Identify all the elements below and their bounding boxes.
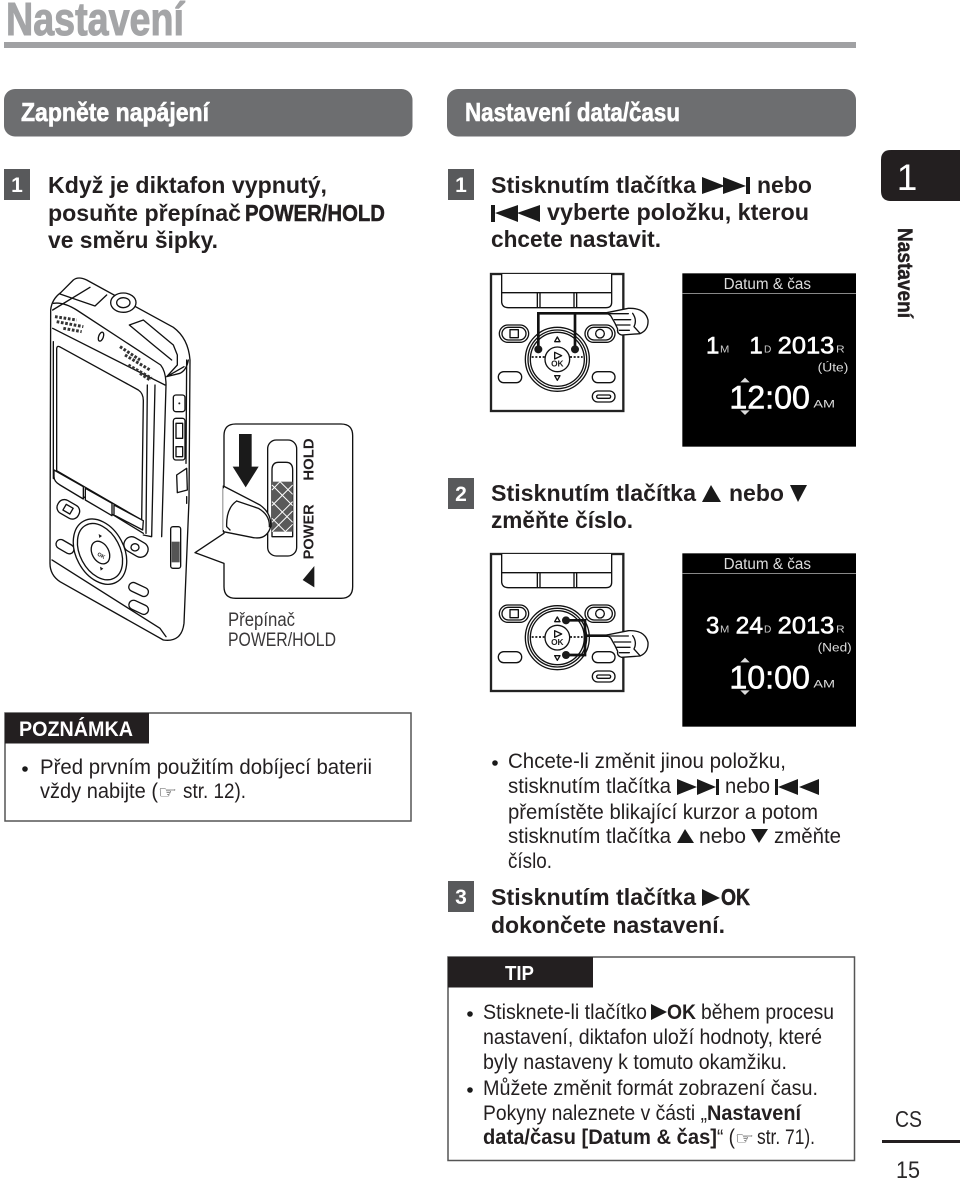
bullet note: changing items: Chcete-li změnit jinou položku, [508, 750, 786, 773]
step 1 right: instruction: nebo [757, 172, 812, 198]
device screen 2: Datum & čas [724, 556, 811, 573]
bullet note: changing items: přemístěte blikající kurzor a potom [508, 801, 818, 824]
device screen 2: 2013 [778, 613, 834, 640]
heading: power on [4, 89, 412, 136]
recorder body: OK [96, 552, 106, 561]
device screen 2: D [764, 625, 771, 636]
tip text: byly nastaveny k tomuto okamžiku. [483, 1051, 787, 1074]
heading: date and time [447, 89, 856, 136]
title rule [4, 42, 856, 48]
pointer lines [538, 313, 612, 349]
soft keys [502, 274, 612, 308]
note text [22, 756, 372, 803]
bullet note: changing items: nebo [699, 825, 746, 848]
step 1 left: number [4, 169, 30, 200]
step 3: number [448, 881, 474, 912]
heading: date and time: Nastavení data/času [465, 97, 680, 127]
bullet note: changing items: stisknutím tlačítka [508, 775, 671, 798]
stop button [499, 605, 529, 622]
step 2: instruction: nebo [729, 480, 784, 506]
tip text: během procesu [701, 1001, 834, 1024]
step 2: instruction: Stisknutím tlačítka [491, 480, 696, 506]
chapter label: Nastavení [893, 228, 916, 319]
recorder body [50, 278, 190, 640]
tip text: Pokyny naleznete v části „ [483, 1102, 707, 1125]
device screen 1: 2013 [778, 333, 834, 360]
bullet note: changing items: nebo [725, 775, 770, 798]
device screen 1: (Úte) [818, 360, 848, 375]
tip text: str. 71). [757, 1126, 815, 1149]
illustration: voice recorder with POWER/HOLD callout [50, 278, 353, 640]
step 1 right: instruction: chcete nastavit. [491, 226, 661, 252]
dial [525, 327, 589, 391]
device screen 1: M [720, 345, 729, 356]
stop and record buttons [55, 497, 82, 522]
step 1 left: number: 1 [11, 174, 23, 197]
record button [585, 325, 615, 342]
note text: str. 12). [183, 780, 246, 803]
step 3: instruction [491, 884, 750, 938]
control panel illustration 2 [491, 554, 648, 691]
device screen 2: M [720, 625, 729, 636]
step 1 left: instruction: Když je diktafon vypnutý, [48, 172, 327, 198]
device screen 1: 12:00 [729, 378, 810, 415]
bullet note: changing items [492, 750, 841, 873]
language code: CS [895, 1106, 922, 1132]
step 2: number: 2 [455, 483, 467, 506]
step 3: instruction: OK [721, 884, 750, 910]
device screen 2 [682, 553, 856, 727]
note label: POZNÁMKA [19, 718, 133, 741]
pointing hand [607, 308, 648, 335]
tip text: “ ( [717, 1126, 735, 1149]
step 2: instruction: změňte číslo. [491, 507, 633, 533]
navigation dial [63, 510, 137, 594]
bullet note: changing items: číslo. [508, 850, 552, 873]
dial: OK [551, 359, 564, 369]
device screen 1: R [836, 345, 845, 356]
POWER/HOLD callout [195, 424, 353, 598]
step 2: instruction [491, 480, 807, 533]
device screen 1: D [764, 345, 771, 356]
device screen 1: 1 [749, 333, 763, 360]
power direction marker [303, 566, 314, 587]
step 1 right: instruction: Stisknutím tlačítka [491, 172, 696, 198]
side ovals [498, 652, 522, 663]
control panel illustration 1 [491, 274, 648, 411]
tip text [467, 1001, 834, 1149]
soft keys [502, 554, 612, 588]
device screen 2: AM [813, 679, 835, 691]
device screen 2: 24 [736, 613, 763, 640]
soft keys [54, 470, 143, 530]
step 1 left: instruction: POWER/HOLD [245, 200, 385, 226]
tip text: ☞ [735, 1129, 754, 1149]
switch caption: POWER/HOLD [228, 630, 336, 651]
step 1 left: instruction: posuňte přepínač [48, 200, 241, 226]
chapter tab: 1 [897, 157, 917, 198]
tip text: Stisknete-li tlačítko [483, 1001, 647, 1024]
device screen 1: 1 [706, 333, 719, 360]
device screen 2: R [836, 625, 845, 636]
note text: Před prvním použitím dobíjecí baterii [40, 756, 372, 779]
pointing hand [607, 631, 648, 657]
device screen 2: (Ned) [818, 641, 852, 655]
tip label [448, 957, 593, 988]
device screen 1: AM [813, 399, 835, 411]
note label [5, 713, 149, 744]
record button [585, 605, 615, 622]
step 1 right: instruction: vyberte položku, kterou [547, 199, 809, 225]
device screen 2: 10:00 [729, 658, 810, 695]
tip text: nastavení, diktafon uloží hodnoty, které [483, 1026, 822, 1049]
tip panel [448, 957, 854, 1160]
step 3: instruction: Stisknutím tlačítka [491, 884, 696, 910]
step 1 right: number: 1 [455, 174, 467, 197]
step 3: number: 3 [455, 886, 467, 909]
stop button [499, 325, 529, 342]
step 3: instruction: dokončete nastavení. [491, 912, 725, 938]
speaker grills [55, 317, 152, 380]
device screen 2: 3 [706, 613, 719, 640]
step 1 right: instruction [491, 172, 812, 252]
note text: ☞ [158, 783, 177, 803]
dial: OK [551, 637, 564, 647]
side controls [173, 395, 185, 412]
microphone ring [111, 293, 136, 312]
small oval buttons [54, 538, 76, 556]
tip text: data/času [Datum & čas] [483, 1126, 717, 1149]
display [57, 346, 143, 520]
step 1 left: instruction: ve směru šipky. [48, 227, 218, 253]
crosshatched slider [272, 482, 293, 532]
step 1 left: instruction [48, 172, 385, 253]
pointer lines [566, 620, 612, 655]
step 1 right: number [448, 169, 474, 200]
tip text: Můžete změnit formát zobrazení času. [483, 1077, 818, 1100]
step 2: number [448, 478, 474, 509]
switch caption [228, 610, 336, 651]
tip text: OK [667, 1001, 696, 1024]
POWER/HOLD callout: POWER [302, 504, 318, 559]
dial [525, 606, 589, 670]
heading: power on: Zapněte napájení [21, 97, 210, 127]
tip text: Nastavení [707, 1102, 802, 1125]
device screen 1 [682, 273, 856, 447]
finger [223, 486, 271, 538]
chapter tab [881, 150, 960, 201]
note text: vždy nabijte ( [40, 780, 158, 803]
switch caption: Přepínač [228, 610, 295, 631]
side ovals [498, 372, 522, 383]
down arrow [233, 434, 259, 487]
switch labels: HOLD [302, 438, 318, 481]
switch slot [268, 440, 297, 556]
device screen 1: Datum & čas [724, 276, 811, 293]
bullet note: changing items: změňte [774, 825, 841, 848]
footer rule [882, 1140, 960, 1143]
tip label: TIP [505, 963, 534, 985]
bullet note: changing items: stisknutím tlačítka [508, 825, 671, 848]
note panel [5, 713, 411, 821]
